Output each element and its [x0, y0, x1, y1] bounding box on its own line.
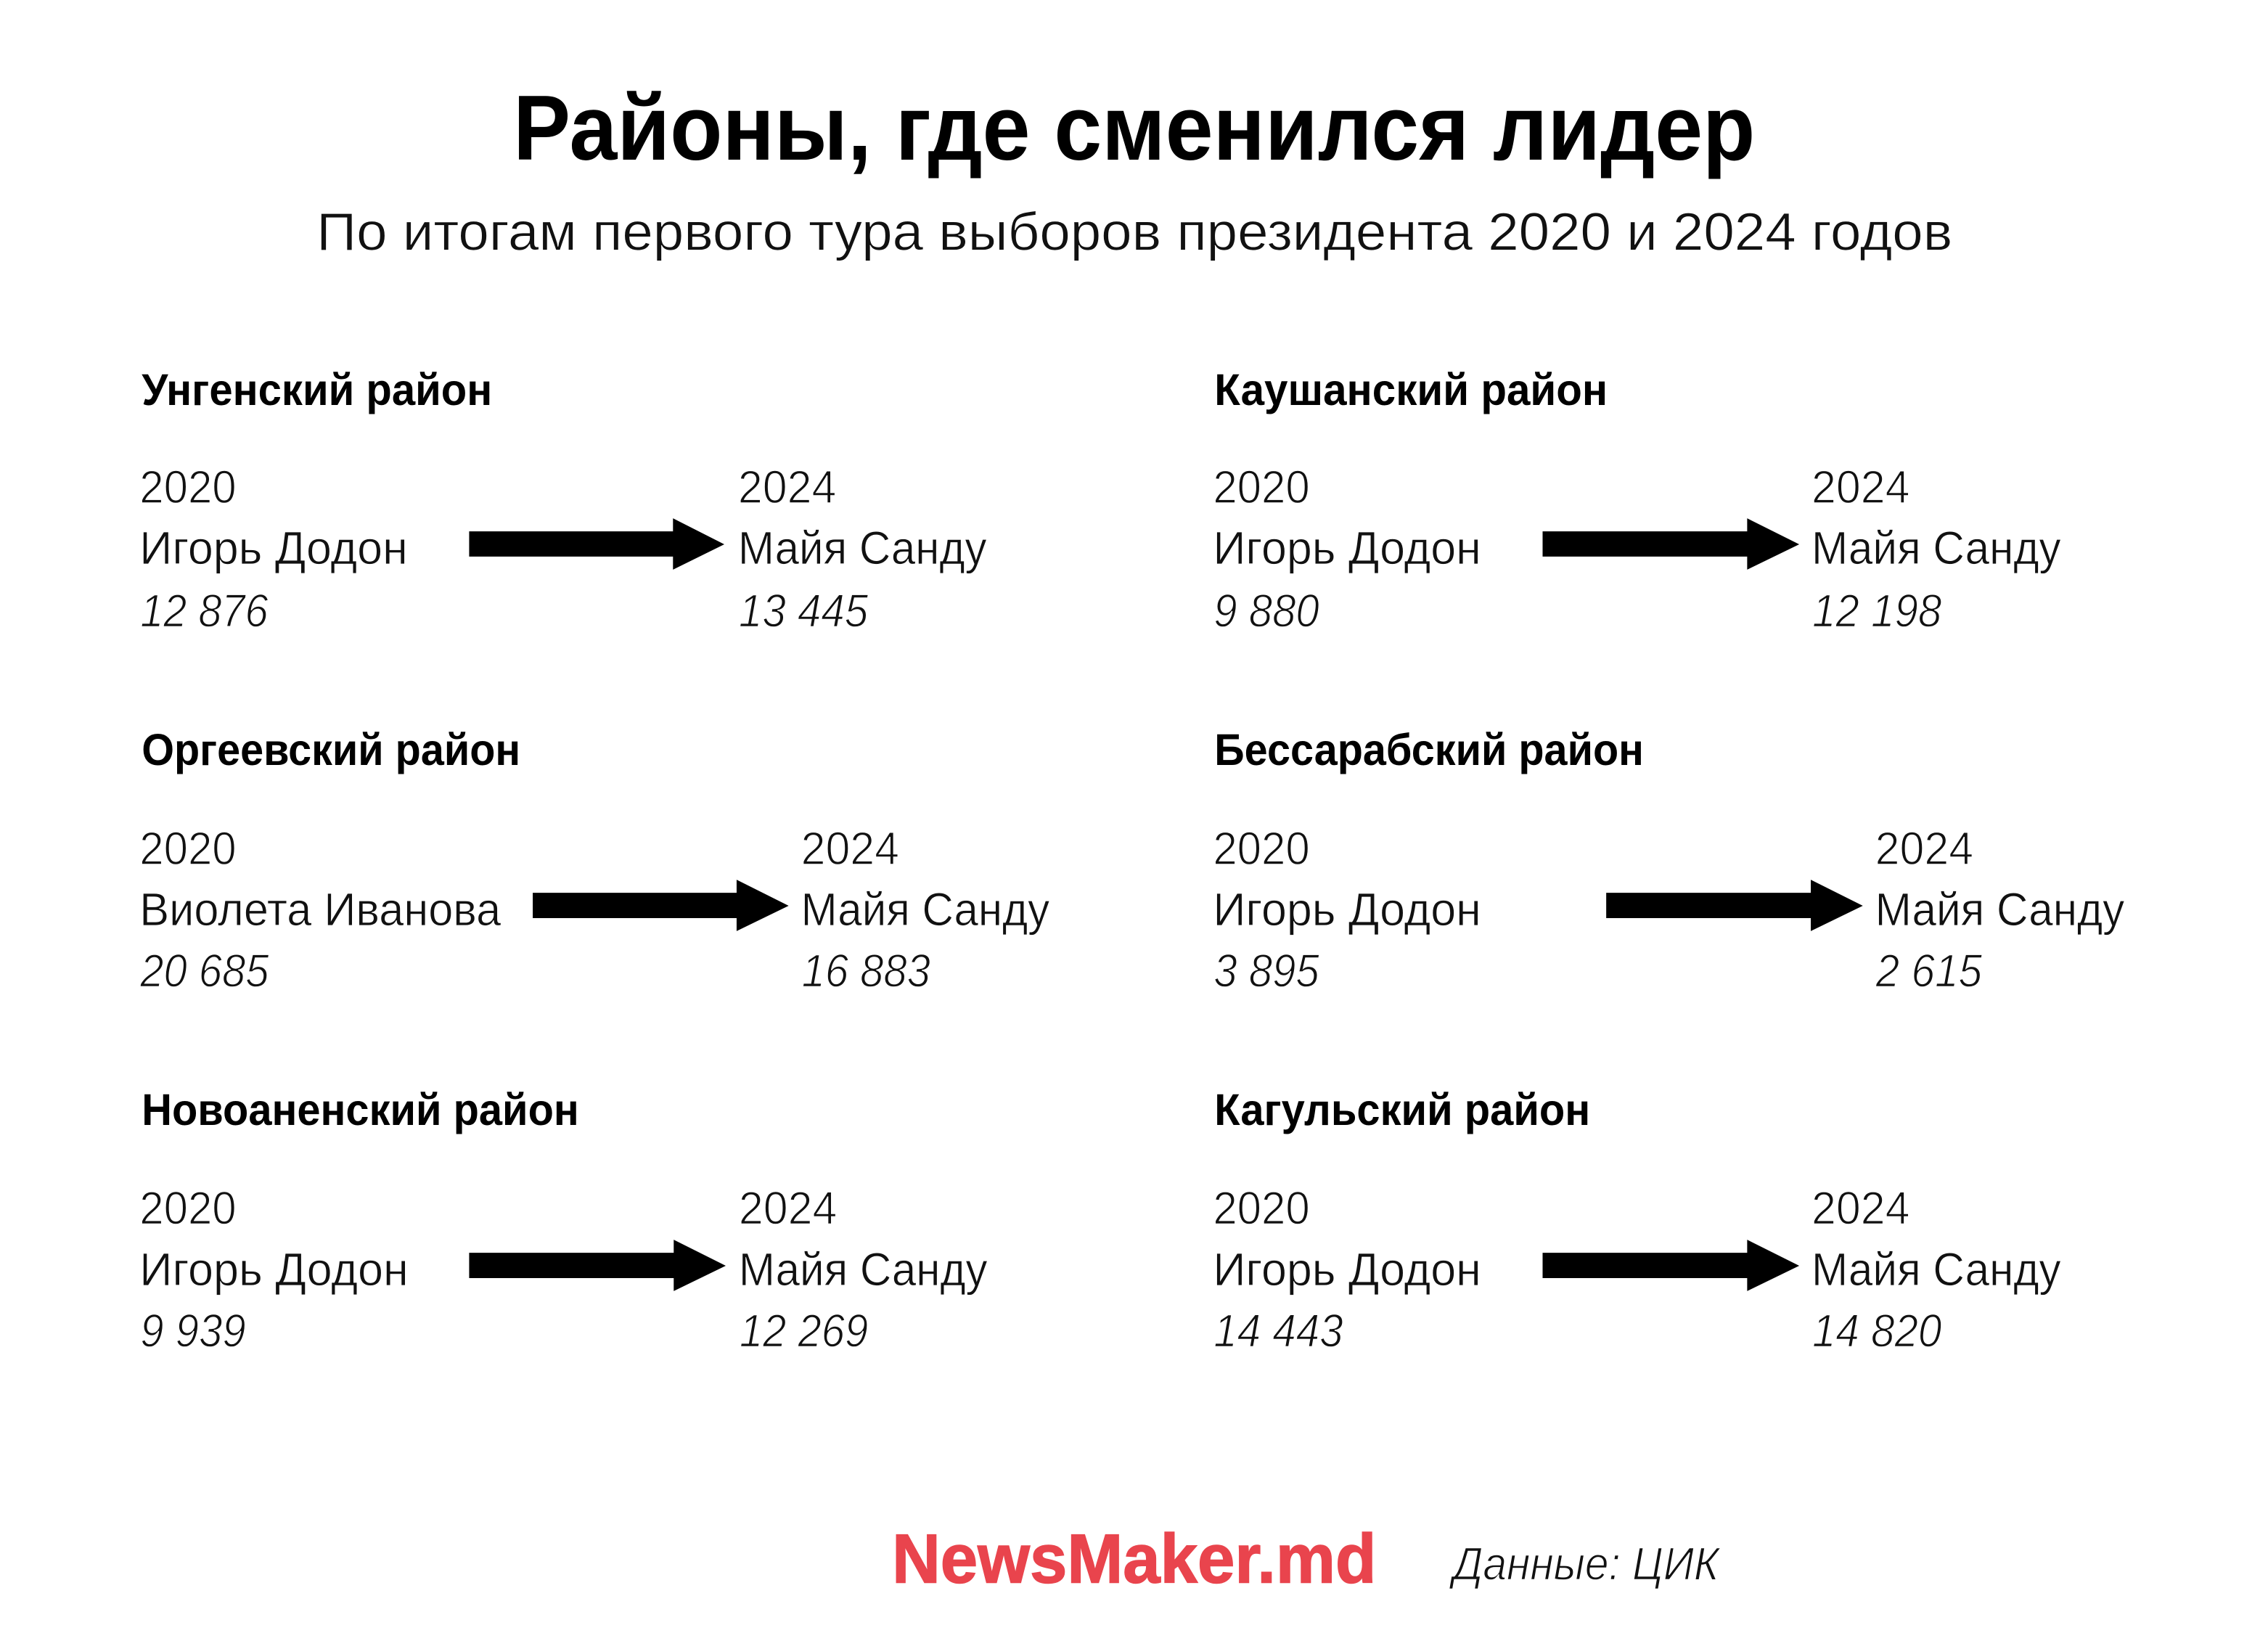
district heading: Каушанский район [1214, 365, 1608, 414]
2024 leader: Майя Санду [739, 1243, 988, 1296]
2024 leader: Майя Санду [801, 883, 1049, 936]
2020 votes: 20 685 [139, 945, 269, 997]
source note: Данные: ЦИК [1449, 1537, 1722, 1589]
panel: Унгенский район [139, 365, 987, 637]
panel: Оргеевский район [139, 725, 1049, 997]
2020 votes: 3 895 [1213, 945, 1319, 997]
2024 year: 2024 [738, 461, 836, 513]
subtitle: По итогам первого тура выборов президента 2020 и 2024 годов [316, 202, 1952, 262]
2024 leader: Майя Санду [1811, 1243, 2061, 1296]
2024 year: 2024 [1811, 1182, 1909, 1234]
2020 leader: Игорь Додон [1213, 883, 1481, 936]
district heading: Кагульский район [1214, 1085, 1590, 1134]
arrow [533, 880, 789, 931]
title: Районы, где сменился лидер [513, 77, 1755, 180]
2024 votes: 12 269 [740, 1305, 868, 1357]
district heading: Оргеевский район [142, 725, 520, 774]
2020 year: 2020 [1213, 1182, 1310, 1234]
2020 year: 2020 [1213, 461, 1310, 513]
2024 leader: Майя Санду [738, 522, 987, 574]
2024 year: 2024 [801, 822, 899, 875]
2024 leader: Майя Санду [1811, 522, 2061, 574]
2020 votes: 12 876 [140, 585, 269, 637]
2020 year: 2020 [1213, 822, 1310, 875]
panel: Каушанский район [1213, 365, 2061, 637]
arrow [1542, 1240, 1799, 1291]
2020 leader: Виолета Иванова [139, 883, 502, 936]
2020 leader: Игорь Додон [139, 522, 408, 574]
arrow [1542, 518, 1799, 570]
2024 votes: 16 883 [802, 945, 930, 997]
arrow [469, 518, 724, 570]
2020 votes: 9 939 [140, 1305, 246, 1357]
2024 leader: Майя Санду [1875, 883, 2124, 936]
2024 votes: 13 445 [739, 585, 869, 637]
2020 votes: 14 443 [1213, 1305, 1343, 1357]
2020 leader: Игорь Додон [139, 1243, 409, 1296]
district heading: Унгенский район [142, 365, 492, 414]
2024 year: 2024 [1875, 822, 1973, 875]
2024 votes: 14 820 [1812, 1305, 1941, 1357]
2024 votes: 12 198 [1812, 585, 1942, 637]
2020 leader: Игорь Додон [1213, 1243, 1481, 1296]
panel: Новоаненский район [139, 1085, 988, 1357]
arrow [469, 1240, 726, 1291]
2020 votes: 9 880 [1213, 585, 1319, 637]
2020 year: 2020 [139, 822, 237, 875]
panel: Бессарабский район [1213, 725, 2124, 997]
2020 leader: Игорь Додон [1213, 522, 1481, 574]
2020 year: 2020 [139, 1182, 237, 1234]
2020 year: 2020 [139, 461, 237, 513]
panel: Кагульский район [1213, 1085, 2061, 1357]
district heading: Новоаненский район [142, 1085, 579, 1134]
2024 votes: 2 615 [1875, 945, 1983, 997]
2024 year: 2024 [739, 1182, 837, 1234]
arrow [1606, 880, 1863, 931]
logo: NewsMaker.md: NewsMaker.md [892, 1520, 1376, 1597]
2024 year: 2024 [1811, 461, 1909, 513]
district heading: Бессарабский район [1214, 725, 1644, 774]
